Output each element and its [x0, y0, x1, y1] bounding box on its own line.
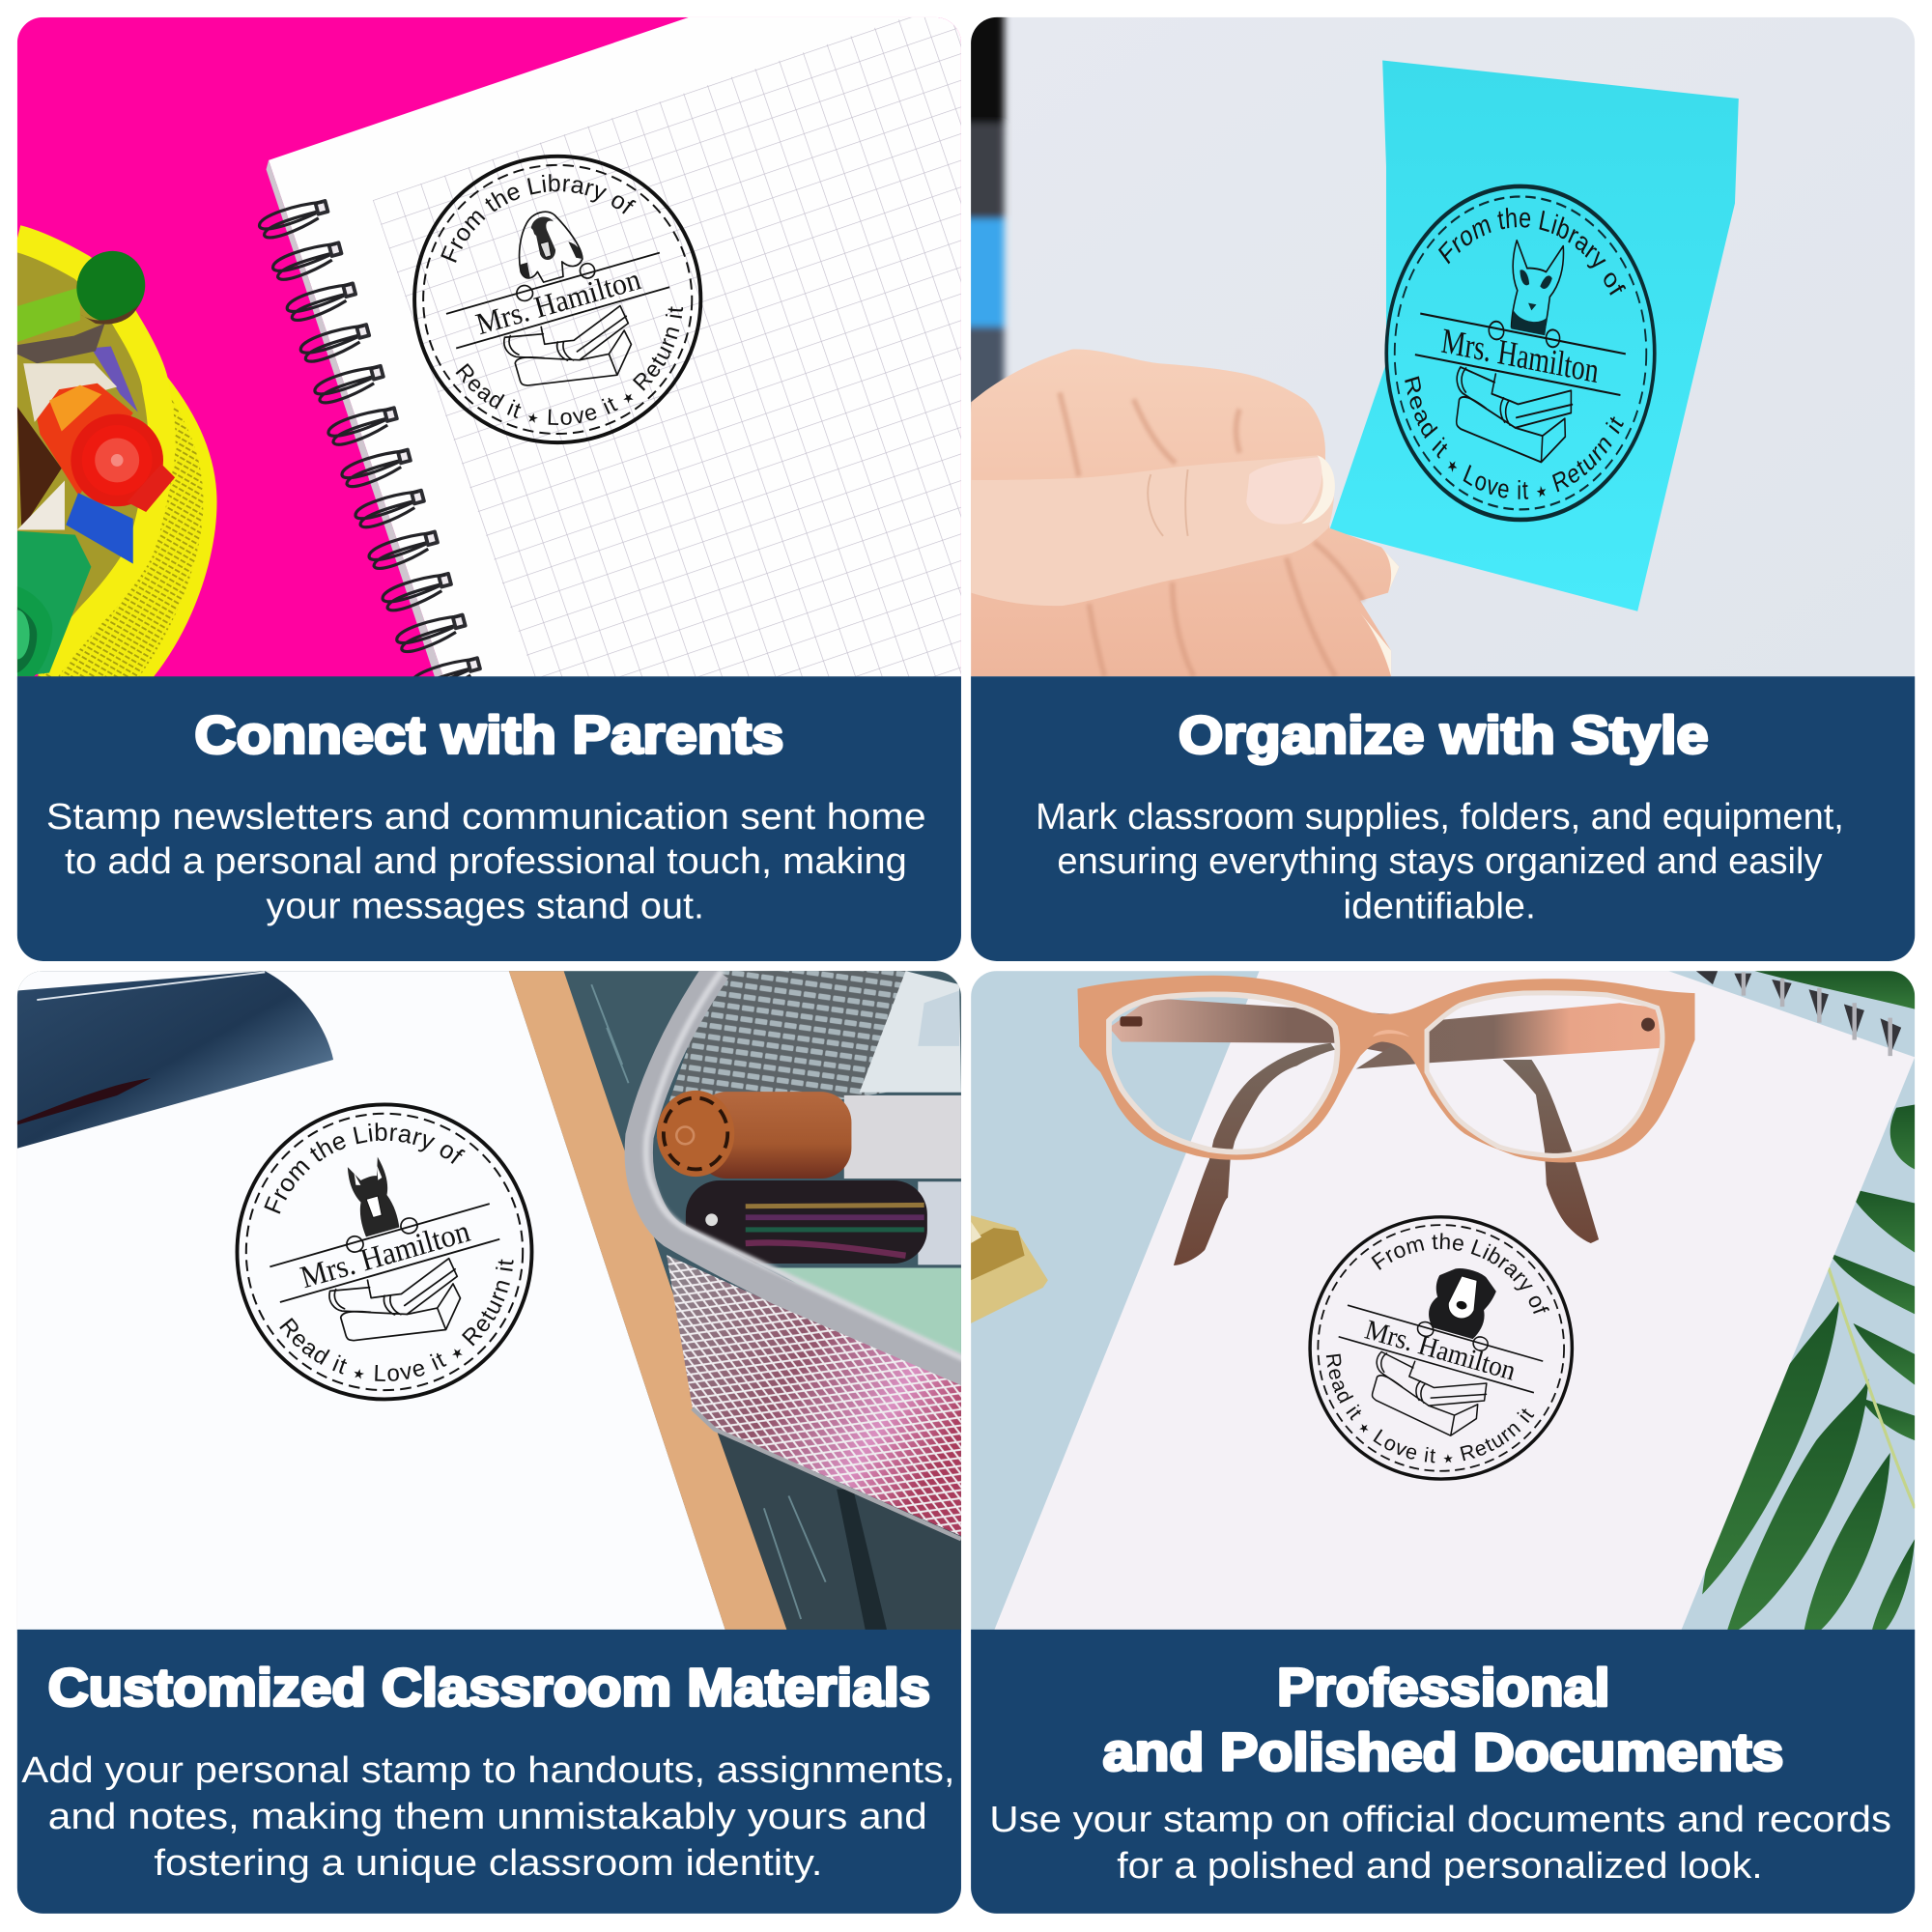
stamp: Mrs. Hamilton	[472, 262, 644, 341]
body text	[1036, 796, 1844, 926]
title: Professional	[1277, 1657, 1610, 1717]
stamp	[1384, 184, 1657, 522]
icon: basset hound	[516, 211, 595, 301]
body text: ensuring everything stays organized and easily	[1057, 840, 1823, 882]
stamp: From the Library of	[264, 1122, 466, 1214]
body text: Add your personal stamp to handouts, assignments,	[21, 1749, 955, 1791]
basket	[17, 239, 217, 678]
stamp: Mrs. Hamilton	[1361, 1315, 1520, 1387]
clipboard clip	[17, 971, 333, 1149]
icon: shepherd dog	[346, 1157, 418, 1253]
stamp	[236, 1103, 533, 1401]
caption bar	[971, 1630, 1915, 1914]
caption bar	[17, 676, 961, 961]
icon: cattle dog	[1488, 240, 1565, 348]
body text: Mark classroom supplies, folders, and equipment,	[1036, 796, 1844, 838]
photo: sticky note held by hand	[960, 6, 1915, 679]
panel: Professional and Polished Documents	[971, 971, 1915, 1914]
caption bar	[17, 1630, 961, 1914]
stamp	[412, 155, 703, 444]
body text: Use your stamp on official documents and records	[989, 1799, 1891, 1840]
notepad spiral	[1696, 971, 1901, 1056]
body text	[46, 796, 926, 926]
stamp: Mrs. Hamilton	[297, 1214, 474, 1295]
stamp: Read it ★ Love it ★ Return it	[1325, 1354, 1534, 1463]
stamp: From the Library of	[1437, 208, 1627, 296]
caption bar	[971, 676, 1915, 961]
stamp	[1308, 1215, 1575, 1481]
glasses	[1077, 976, 1695, 1265]
body text: to add a personal and professional touch, making	[65, 840, 907, 882]
stamp: Read it ★ Love it ★ Return it	[279, 1260, 514, 1381]
title: Organize with Style	[1179, 704, 1709, 764]
panel: Connect with Parents	[17, 17, 961, 961]
palm leaves	[1702, 971, 1915, 1632]
panel: Customized Classroom Materials	[17, 971, 961, 1914]
body text: your messages stand out.	[267, 885, 704, 926]
body text: identifiable.	[1343, 885, 1536, 926]
photo: notebook on pink background	[5, 17, 961, 695]
body text: fostering a unique classroom identity.	[154, 1842, 822, 1884]
gold clip	[971, 1215, 1048, 1323]
body text	[989, 1799, 1891, 1887]
icon: pit bull dog	[1416, 1268, 1496, 1351]
stamp: Mrs. Hamilton	[1439, 322, 1601, 391]
title: and Polished Documents	[1103, 1721, 1783, 1781]
body text: Stamp newsletters and communication sent home	[46, 796, 926, 838]
body text: for a polished and personalized look.	[1117, 1845, 1763, 1887]
body text	[21, 1749, 955, 1884]
stamp: From the Library of	[1371, 1233, 1549, 1314]
mesh basket	[639, 970, 967, 1539]
icon: hand	[971, 350, 1399, 676]
title: Customized Classroom Materials	[48, 1657, 930, 1717]
panel: Organize with Style	[971, 17, 1915, 961]
title: Connect with Parents	[195, 704, 783, 764]
stamp: Read it ★ Love it ★ Return it	[456, 306, 684, 425]
markers	[5, 240, 175, 676]
photo: paper on clipboard with pen basket	[17, 970, 967, 1634]
stamp: From the Library of	[440, 174, 637, 263]
body text: and notes, making them unmistakably yours and	[48, 1796, 927, 1837]
title	[1103, 1657, 1783, 1781]
stamp: Read it ★ Love it ★ Return it	[1405, 376, 1624, 499]
photo: notepad with glasses and palm leaf	[971, 971, 1915, 1634]
